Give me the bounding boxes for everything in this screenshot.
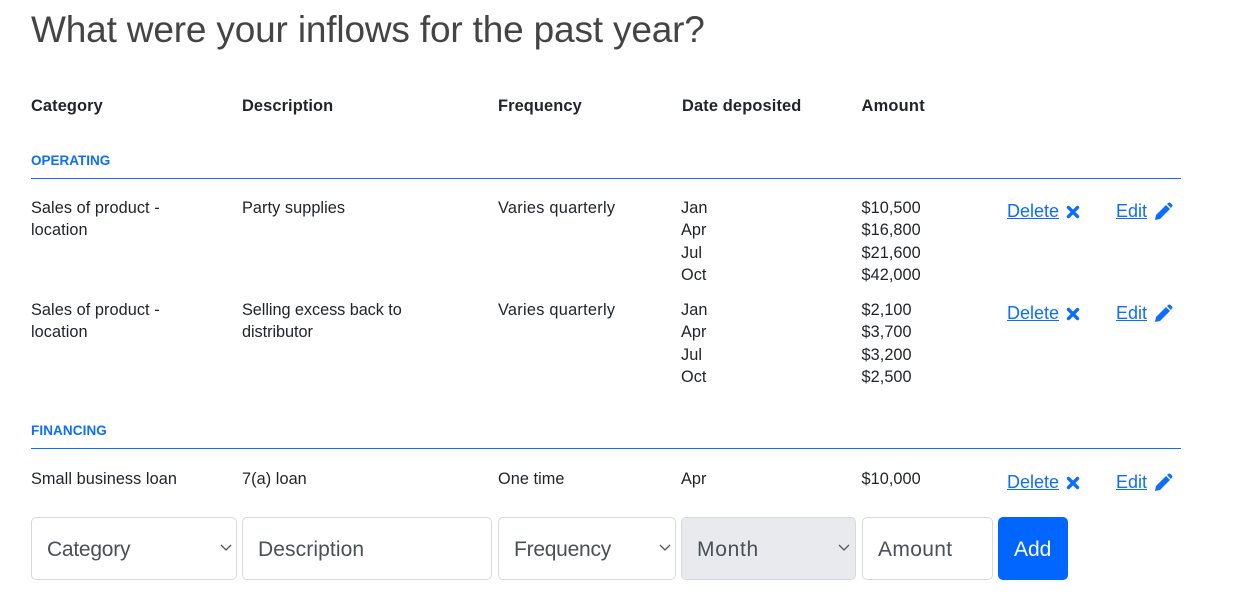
row: selling excess: $2,500 <box>862 368 912 386</box>
row: party supplies: Sales of product - <box>31 199 160 217</box>
button: add <box>998 517 1068 580</box>
row: selling excess: Jul <box>681 346 702 364</box>
table header: Category <box>31 97 103 115</box>
row: selling excess: $3,700 <box>862 323 912 341</box>
select: frequency <box>498 517 676 580</box>
table header: Date deposited <box>682 97 801 115</box>
table header: Frequency <box>498 97 582 115</box>
row: party supplies: $21,600 <box>862 244 921 262</box>
row: selling excess: distributor <box>242 323 313 341</box>
row: party supplies: $10,500 <box>862 199 921 217</box>
row: party supplies: Jul <box>681 244 702 262</box>
row: selling excess: location <box>31 323 88 341</box>
row: small business loan: One time <box>498 470 565 488</box>
input: description <box>242 517 492 580</box>
row: small business loan: Apr <box>681 470 707 488</box>
input: description: Description <box>258 538 364 561</box>
row: party supplies: Apr <box>681 221 707 239</box>
table header <box>31 97 925 115</box>
row: selling excess: Sales of product - <box>31 301 160 319</box>
row: party supplies: Varies quarterly <box>498 199 615 217</box>
row: small business loan: Delete <box>1007 472 1059 492</box>
section heading: operating: OPERATING <box>31 153 110 168</box>
row: selling excess: Selling excess back to <box>242 301 402 319</box>
row: small business loan: $10,000 <box>862 470 921 488</box>
row: selling excess: Edit <box>1116 303 1147 323</box>
row: selling excess: $2,100 <box>862 301 912 319</box>
row: selling excess: $3,200 <box>862 346 912 364</box>
select: month: Month <box>697 538 759 561</box>
row: small business loan: 7(a) loan <box>242 470 307 488</box>
table header: Description <box>242 97 333 115</box>
row: selling excess <box>31 301 1172 386</box>
row: party supplies: Jan <box>681 199 707 217</box>
row: party supplies: Oct <box>681 266 707 284</box>
row: party supplies: Delete <box>1007 201 1059 221</box>
row: selling excess: Jan <box>681 301 707 319</box>
row: party supplies: location <box>31 221 88 239</box>
input: amount: Amount <box>878 538 952 561</box>
row: selling excess: Apr <box>681 323 707 341</box>
section heading: financing: FINANCING <box>31 423 107 438</box>
row: small business loan <box>31 470 1172 492</box>
row: small business loan: Edit <box>1116 472 1147 492</box>
input: amount <box>862 517 993 580</box>
row: party supplies: Edit <box>1116 201 1147 221</box>
row: party supplies: $16,800 <box>862 221 921 239</box>
table header: Amount <box>862 97 925 115</box>
select: month <box>681 517 856 580</box>
row: small business loan: Small business loan <box>31 470 177 488</box>
row: party supplies: Party supplies <box>242 199 345 217</box>
row: party supplies <box>31 199 1172 284</box>
select: frequency: Frequency <box>514 538 611 561</box>
title: What were your inflows for the past year? <box>31 9 705 50</box>
button: add: Add <box>1014 538 1051 561</box>
select: category <box>31 517 237 580</box>
row: selling excess: Delete <box>1007 303 1059 323</box>
select: category: Category <box>47 538 130 561</box>
row: party supplies: $42,000 <box>862 266 921 284</box>
row: selling excess: Oct <box>681 368 707 386</box>
row: selling excess: Varies quarterly <box>498 301 615 319</box>
